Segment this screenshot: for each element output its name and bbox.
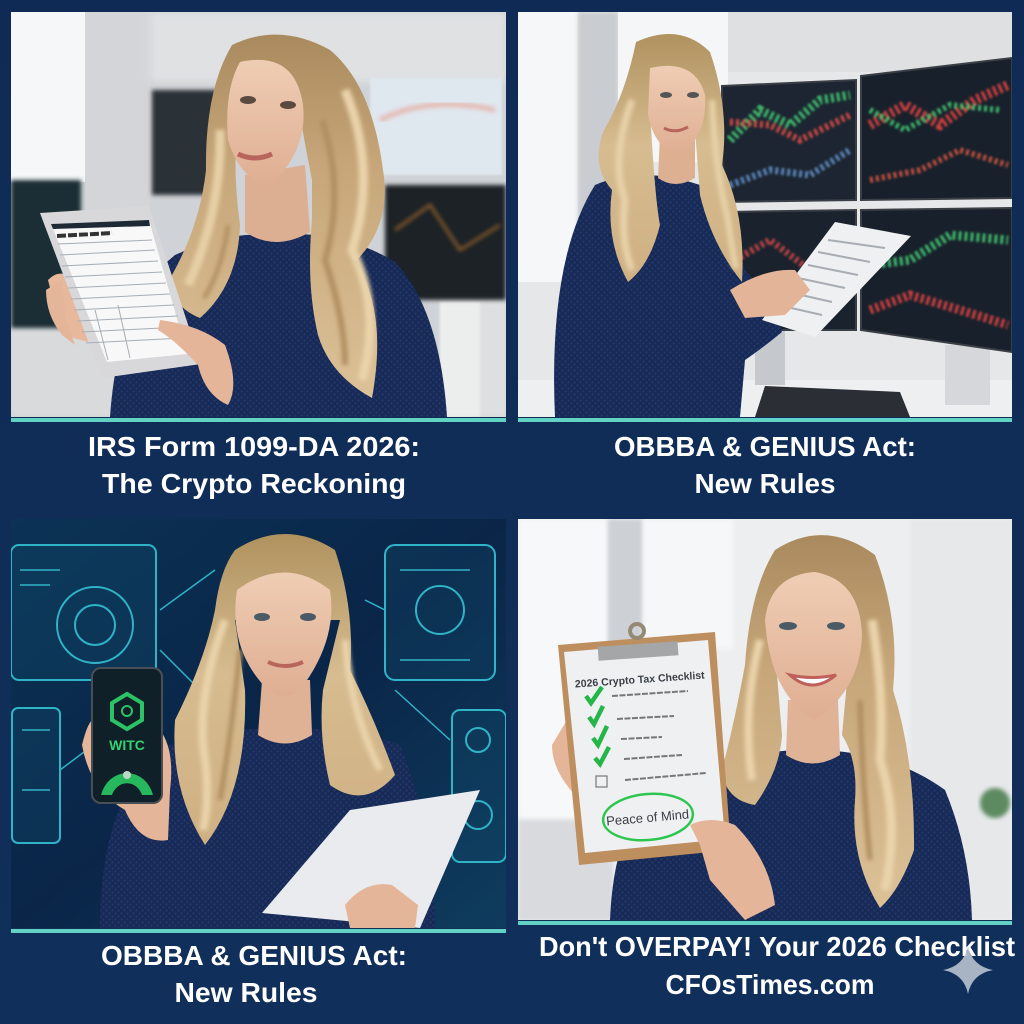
divider: top right [518,418,1012,422]
panel: IRS form photo [11,12,506,417]
panel: checklist photo [518,519,1012,920]
panel: digital wallet photo [11,519,506,928]
callout: peace of mind [601,790,695,844]
holographic interface panels [11,545,506,862]
paper sheet [262,790,480,928]
heading: IRS Form: The Crypto Reckoning [102,468,406,499]
heading: IRS Form: IRS Form 1099-DA 2026: [88,431,420,462]
woman with clipboard [552,535,972,920]
icon: plant [980,788,1010,818]
heading: OBBBA bottom: New Rules [174,977,318,1008]
icon: keyboard [755,386,910,417]
woman with phone [82,534,480,928]
heading: OBBBA top: New Rules [694,468,836,499]
heading: OBBBA bottom [101,940,407,1008]
icon: phone with wallet app [92,668,162,803]
heading: OBBBA top: OBBBA & GENIUS Act: [614,431,916,462]
clipboard checklist [558,624,731,865]
woman with paper [554,34,911,417]
heading: IRS Form [88,431,420,499]
divider: top left [11,418,506,422]
heading: OBBBA bottom: OBBBA & GENIUS Act: [101,940,407,971]
clipboard checklist: 2026 Crypto Tax Checklist [575,669,706,691]
paper document [762,222,911,337]
divider: bottom left [11,929,506,933]
callout: peace of mind: Peace of Mind [606,806,690,829]
icon: phone with wallet app: WITC [109,737,145,753]
woman with tablet [40,35,447,417]
heading: checklist: CFOsTimes.com [666,969,874,1000]
tablet with form [40,206,201,378]
heading: OBBBA top [614,431,916,499]
icon: sparkle [943,946,993,994]
heading: checklist [539,931,1015,1000]
divider: bottom right [518,921,1012,925]
heading: checklist: Don't OVERPAY! Your 2026 Checklist [539,931,1015,962]
panel: trading monitors photo [518,12,1012,417]
trading monitors [722,58,1012,405]
